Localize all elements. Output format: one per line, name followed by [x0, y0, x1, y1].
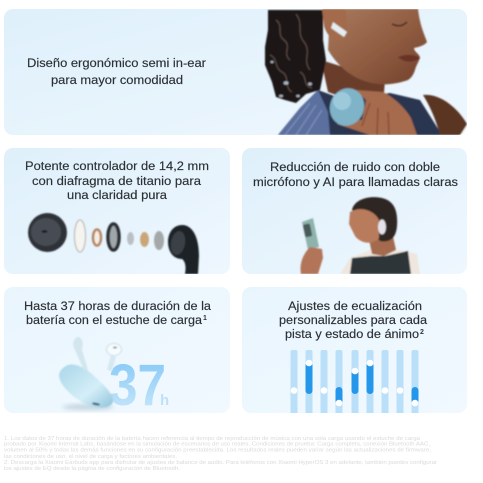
footnotes: 2. Descarga la Xiaomi Earbuds app para disfrutar de ajustes de balance de audio. Para teléfonos con Xiaomi HyperOS 3 en adelante, también puedes configurar [4, 460, 437, 466]
footnotes: volumen al 50% y todas las demás funciones en su configuración preestablecida. Los resultados reales pueden variar según las actualizaciones de firmware, [4, 448, 431, 454]
panel: equalizer [242, 287, 467, 416]
shoulder [423, 95, 467, 135]
hair [352, 197, 397, 241]
neck [368, 237, 397, 258]
heading: ergonomic design: Diseño ergonómico semi in-ear [27, 56, 206, 70]
footnotes [4, 436, 437, 472]
icon: gold part [140, 232, 149, 247]
footnotes: probado por Xiaomi Internal Labs, basándose en la simulación de escenarios de uso reales. Condiciones de prueba: Carga completa, conexión Bluetooth AAC, [4, 442, 430, 448]
panel: battery life [4, 287, 230, 418]
footnotes: los ajustes de EQ desde la página de configuración de Bluetooth. [4, 466, 180, 472]
panel: ergonomic design [4, 9, 467, 135]
icon: left earbud [73, 337, 88, 370]
heading: noise reduction: Reducción de ruido con doble [270, 160, 440, 174]
photo: woman on phone call [300, 197, 420, 274]
footnotes: las condiciones de uso, el nivel de carga y factores ambientales. [4, 454, 177, 460]
heading: battery: Hasta 37 horas de duración de la [24, 299, 211, 313]
footnotes: 1. Los datos de 37 horas de duración de la batería hacen referencia al tiempo de reproducción de música con una sola carga usando el estuche de carga [4, 436, 421, 442]
heading: equalizer: 2 [420, 329, 424, 336]
heading: noise reduction: micrófono y AI para llamadas claras [253, 175, 458, 189]
heading: ergonomic design: para mayor comodidad [51, 73, 183, 87]
chart: equalizer sliders [290, 350, 418, 416]
heading: driver: con diafragma de titanio para [32, 174, 201, 188]
heading: driver: Potente controlador de 14,2 mm [25, 159, 209, 173]
icon: outer black disc [28, 213, 67, 252]
icon: pearl diaphragm [74, 220, 86, 252]
panel: noise reduction [242, 148, 467, 274]
icon: charging case [59, 364, 113, 408]
big number: 37h: h [160, 392, 169, 409]
heading: noise reduction [253, 160, 458, 189]
heading: driver: una claridad pura [67, 188, 167, 202]
heading: equalizer: pista y estado de ánimo [285, 327, 419, 341]
heading: equalizer [279, 299, 427, 341]
ear [321, 9, 346, 36]
big number: 37h: 37 [109, 353, 166, 418]
face [349, 209, 379, 243]
hand behind case [337, 90, 417, 135]
heading: equalizer: personalizables para cada [279, 313, 427, 327]
icon: dark ring [108, 224, 119, 250]
icon: phone [302, 218, 319, 250]
illustration: case and earbuds [59, 337, 122, 410]
icon: small grey part [127, 232, 134, 245]
icon: grey magnet [154, 231, 164, 250]
hand [300, 247, 323, 274]
shadow [62, 404, 114, 410]
icon: earbud [378, 220, 386, 234]
heading: driver [25, 159, 209, 202]
heading: battery [24, 299, 211, 327]
panel: titanium driver [4, 148, 230, 274]
illustration: exploded earbud components [28, 213, 199, 274]
heading: equalizer: Ajustes de ecualización [288, 299, 422, 313]
face [328, 9, 427, 84]
torso [340, 250, 420, 274]
icon: earbud in ear [331, 22, 347, 37]
hair [265, 10, 326, 103]
shirt [278, 90, 442, 135]
heading: battery: batería con el estuche de carga [26, 313, 202, 327]
photo: woman wearing earbud holding case [265, 9, 467, 135]
icon: black earbud [168, 225, 199, 274]
icon: right earbud [106, 344, 122, 371]
heading: ergonomic design [27, 56, 206, 87]
heading: battery: 1 [203, 315, 207, 322]
icon: earbud case [328, 87, 366, 127]
icon: copper ring [93, 230, 101, 246]
neck [321, 60, 385, 100]
